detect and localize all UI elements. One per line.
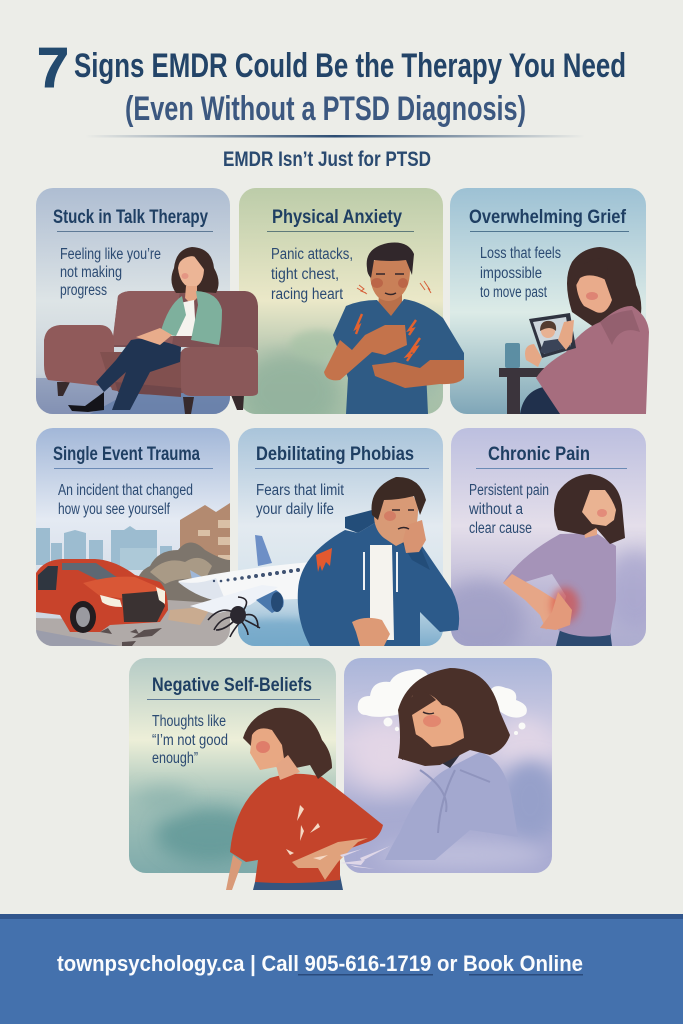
description: enough” [152, 750, 198, 767]
heading: Chronic Pain [488, 444, 590, 465]
collapsed building [180, 503, 230, 557]
woman hair back [171, 247, 219, 293]
panel: physical anxiety [239, 188, 443, 414]
description: An incident that changed [58, 482, 193, 499]
illustration: man holding chest [324, 242, 464, 414]
description [256, 482, 345, 518]
heading: Debilitating Phobias [256, 444, 414, 465]
panel: debilitating phobias [238, 428, 443, 646]
subtitle: EMDR Isn’t Just for PTSD [223, 148, 431, 171]
description [480, 245, 561, 301]
car [36, 559, 168, 633]
description: how you see yourself [58, 501, 171, 518]
ground [36, 600, 230, 646]
illustration: crashed car and city [36, 503, 230, 646]
thought clouds [358, 669, 527, 735]
title line 2: (Even Without a PTSD Diagnosis) [125, 90, 526, 128]
illustration: sad woman head and shoulders [385, 668, 518, 860]
heading: Single Event Trauma [53, 444, 200, 465]
description: racing heart [271, 286, 344, 303]
panel: stuck in talk therapy [36, 188, 230, 414]
panel: reflective woman [344, 658, 560, 873]
hair [567, 247, 641, 330]
description: not making [60, 264, 122, 281]
description: Feeling like you’re [60, 246, 161, 263]
illustration: woman in armchair [44, 247, 258, 414]
description [58, 482, 193, 518]
heading: Negative Self-Beliefs [152, 675, 312, 696]
panel: chronic pain [451, 428, 646, 646]
description [468, 482, 549, 537]
description: Fears that limit [256, 482, 345, 499]
illustration: woman holding lower back [503, 474, 625, 646]
illustration: anxious man in hoodie [298, 477, 459, 646]
description: without a [468, 501, 523, 518]
description: to move past [480, 284, 548, 301]
title divider [85, 135, 585, 138]
description: tight chest, [271, 266, 339, 283]
heading: Physical Anxiety [272, 207, 402, 228]
face [576, 275, 612, 313]
description: Persistent pain [469, 482, 549, 499]
illustration: airplane and spider [178, 535, 330, 637]
description [271, 246, 353, 303]
description: clear cause [469, 520, 532, 537]
description: Loss that feels [480, 245, 561, 262]
description: Thoughts like [152, 713, 226, 730]
table [499, 368, 545, 414]
illustration: woman in red sweater [226, 708, 390, 890]
tablet [529, 313, 576, 358]
description: your daily life [256, 501, 334, 518]
head [370, 260, 410, 301]
panel: overwhelming grief [450, 188, 646, 414]
spider [208, 597, 260, 637]
footer band [0, 914, 683, 1024]
description: Panic attacks, [271, 246, 353, 263]
cup [505, 343, 520, 368]
heading: Stuck in Talk Therapy [53, 207, 208, 228]
hoodie [536, 306, 649, 414]
description [60, 246, 161, 299]
illustration: woman with tablet [499, 247, 649, 414]
panel: single event trauma [36, 428, 230, 646]
description: impossible [480, 265, 542, 282]
call to action: townpsychology.ca | Call 905-616-1719 or Book Online [57, 951, 583, 976]
rubble cloud [139, 542, 230, 602]
description: “I’m not good [152, 732, 228, 749]
description [152, 713, 228, 767]
description: progress [60, 282, 107, 299]
panel: negative self-beliefs [129, 658, 336, 873]
title numeral: 7 [37, 36, 69, 100]
heading: Overwhelming Grief [469, 207, 627, 228]
